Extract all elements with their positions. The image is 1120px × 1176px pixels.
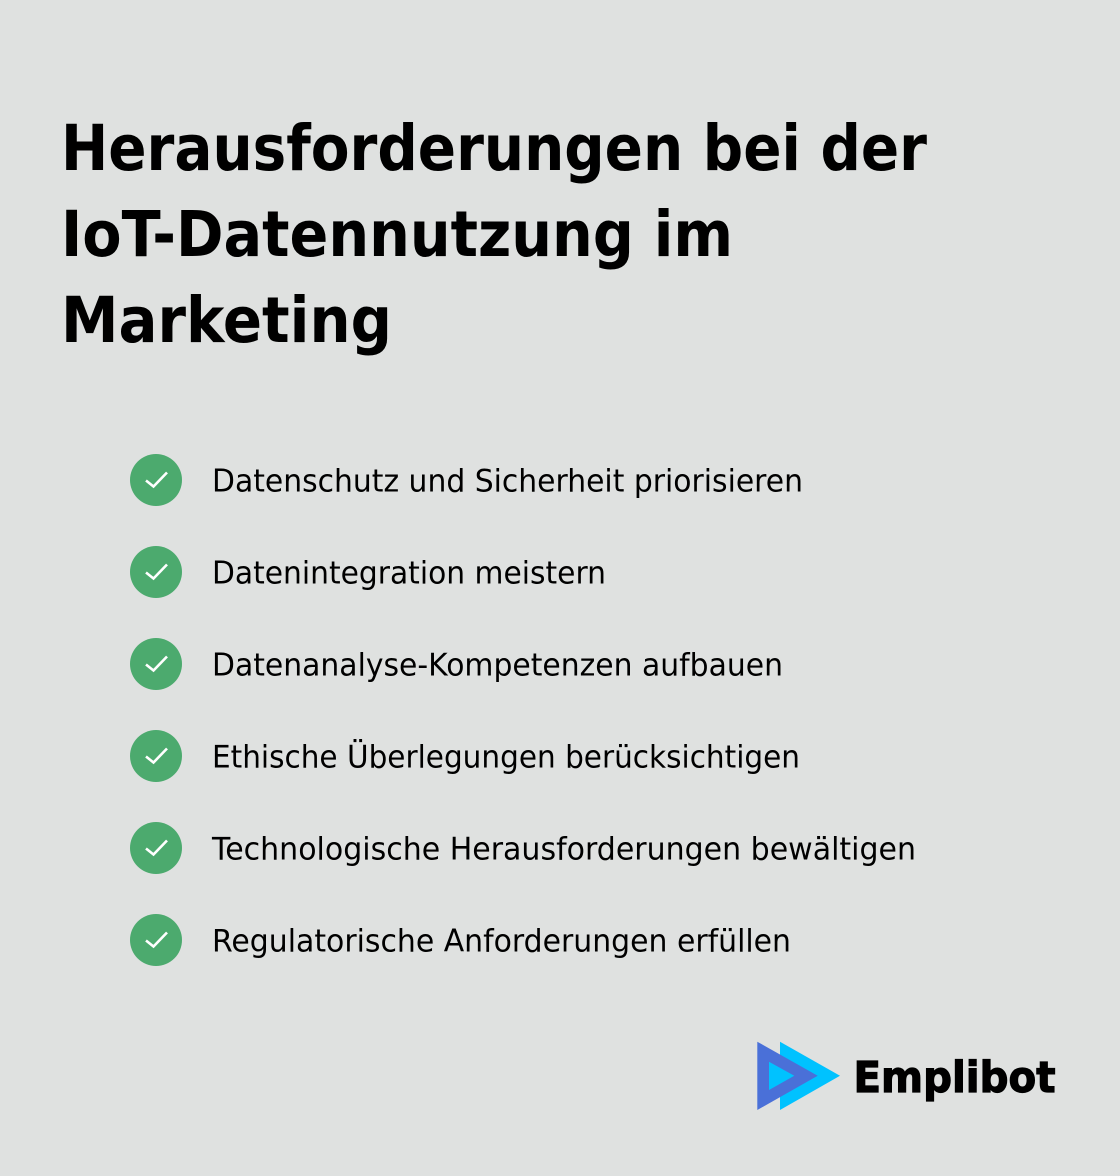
- checklist: [130, 454, 916, 966]
- list item: Datenanalyse: [130, 638, 783, 690]
- title: [61, 112, 927, 357]
- list item: Technologische Herausforderungen: Technologische Herausforderungen bewältigen: [211, 832, 916, 868]
- list item: Datenintegration: [130, 546, 606, 598]
- list item: Regulatorische Anforderungen: [130, 914, 791, 966]
- wordmark: Emplibot: [854, 1053, 1056, 1103]
- list item: Datenschutz: Datenschutz und Sicherheit priorisieren: [212, 464, 803, 500]
- list item: Regulatorische Anforderungen: Regulatorische Anforderungen erfüllen: [212, 924, 791, 960]
- list item: Technologische Herausforderungen: [130, 822, 916, 874]
- title: Marketing: [61, 284, 392, 357]
- title: Herausforderungen bei der: [61, 112, 927, 185]
- list item: Ethische Überlegungen: [130, 730, 800, 782]
- list item: Ethische Überlegungen: Ethische Überlegungen berücksichtigen: [212, 738, 800, 776]
- list item: Datenanalyse: Datenanalyse-Kompetenzen aufbauen: [212, 648, 783, 684]
- title: IoT-Datennutzung im: [61, 198, 733, 271]
- list item: Datenschutz: [130, 454, 803, 506]
- list item: Datenintegration: Datenintegration meistern: [212, 556, 606, 592]
- logo: Emplibot: [757, 1042, 1056, 1110]
- icon: play triangles: [757, 1042, 840, 1110]
